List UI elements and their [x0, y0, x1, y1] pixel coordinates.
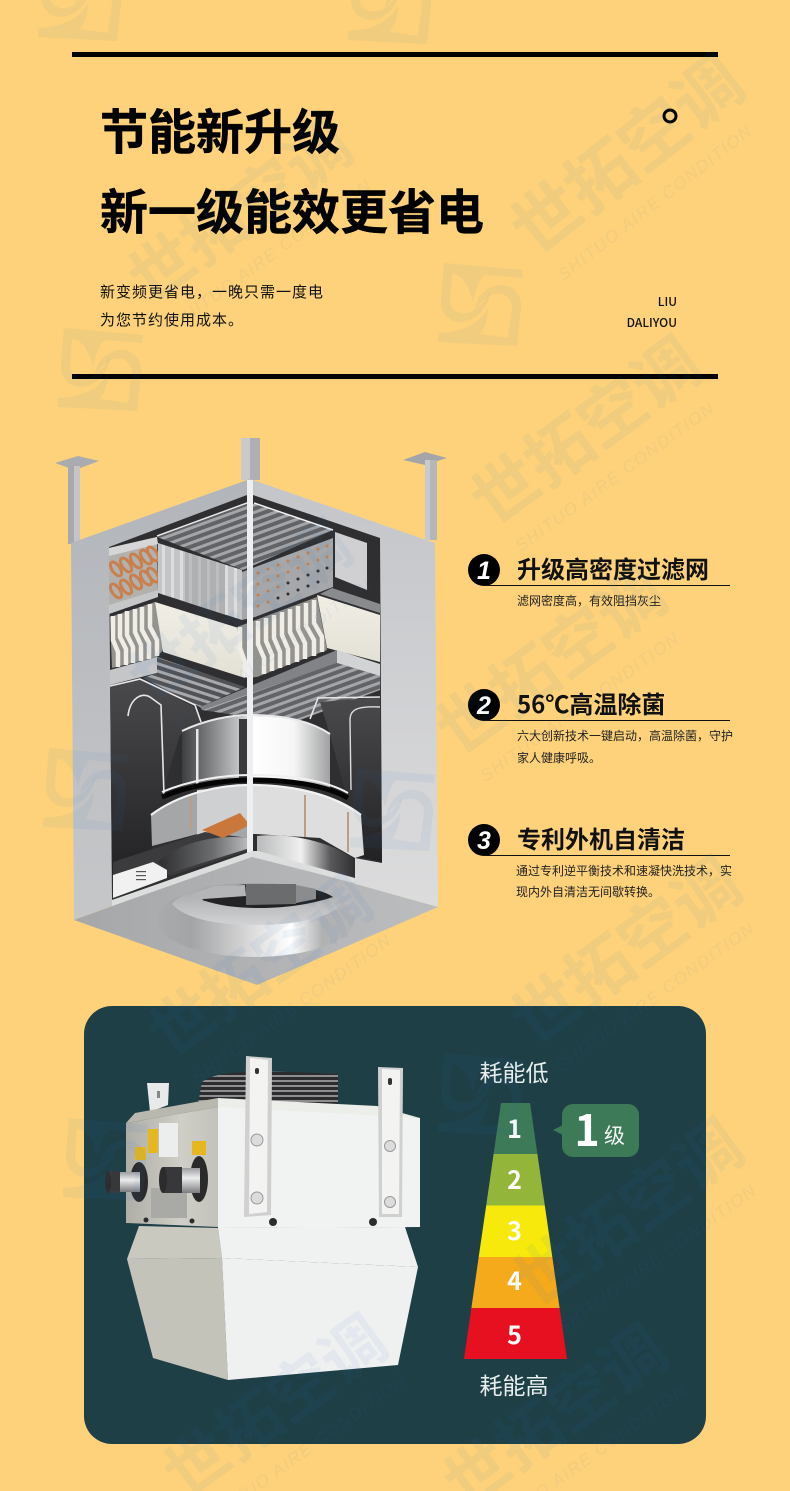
description 2	[517, 727, 733, 766]
description 3: 通过专利逆平衡技术和速凝快洗技术，实	[516, 862, 732, 879]
left pleated filter	[110, 602, 163, 668]
interior backing	[109, 495, 382, 900]
watermark text: SHITUO AIRE CONDITION	[552, 919, 758, 1076]
number badge 2: 2	[476, 692, 491, 720]
level 3: 3	[507, 1212, 522, 1248]
watermark text: 世拓空调	[107, 95, 368, 320]
watermark text: SHITUO AIRE CONDITION	[169, 576, 375, 733]
level 5: 5	[507, 1316, 522, 1352]
hood side	[127, 1258, 228, 1380]
cross beam	[200, 650, 337, 710]
heading 2: 56℃高温除菌	[517, 685, 665, 720]
centrifugal fan drum	[162, 715, 348, 798]
right mounting bracket	[378, 1067, 403, 1217]
fin face of heat exchanger	[158, 543, 242, 620]
side block	[335, 532, 367, 590]
english label	[627, 293, 677, 331]
number badge 1: 1	[477, 557, 491, 585]
icon: small ring	[664, 110, 676, 122]
label: low consumption: 耗能低	[480, 1054, 548, 1088]
intro text: 新变频更省电，一晚只需一度电	[100, 281, 324, 302]
watermark text: 世拓空调	[448, 311, 718, 544]
watermark text: 世拓空调	[127, 850, 388, 1075]
level 4	[471, 1257, 560, 1308]
lower left plate	[110, 657, 157, 685]
title: 新一级能效更省电	[100, 173, 484, 243]
watermark text: 世拓空调	[486, 28, 762, 274]
lower fins right	[202, 663, 380, 720]
watermark text: 世拓空调	[488, 831, 758, 1064]
orange control part	[202, 813, 250, 838]
centre corner post	[247, 480, 253, 858]
number badge 3: 3	[477, 827, 491, 855]
centre mounting bracket	[244, 1056, 272, 1217]
intro text	[100, 281, 324, 330]
level 3	[479, 1206, 552, 1257]
outdoor unit photo	[105, 1056, 420, 1380]
heading 1: 升级高密度过滤网	[517, 550, 709, 585]
level 4: 4	[507, 1262, 522, 1298]
description 1: 滤网密度高，有效阻挡灰尘	[517, 592, 661, 609]
level 1	[494, 1103, 537, 1154]
top plate	[218, 1098, 420, 1118]
feature 3	[468, 820, 732, 900]
right pleated filter	[237, 597, 327, 678]
copper coil box	[108, 537, 161, 614]
cutaway air handling unit illustration	[55, 438, 447, 985]
watermark text: SHITUO AIRE CONDITION	[477, 629, 683, 786]
callout: grade 1: 级	[604, 1120, 625, 1150]
underline	[484, 585, 730, 586]
feature 2	[468, 685, 733, 766]
centre hanger bracket	[241, 438, 260, 480]
underline	[484, 855, 730, 856]
description 3: 现内外自清洁无间歇转换。	[516, 883, 660, 900]
watermark text: SHITUO AIRE CONDITION	[554, 1181, 760, 1338]
callout: grade 1	[553, 1097, 639, 1159]
lower chamber	[110, 678, 382, 875]
watermark text: SHITUO AIRE CONDITION	[512, 399, 718, 556]
bottom face	[74, 855, 438, 985]
right pipe	[159, 1156, 208, 1202]
ceiling fins	[157, 504, 333, 570]
lower fins left	[143, 657, 245, 707]
electric box	[159, 1123, 178, 1157]
panel background	[84, 1006, 706, 1444]
title	[100, 93, 484, 243]
side panel	[126, 1107, 218, 1227]
left pipe	[105, 1162, 148, 1202]
energy pyramid	[464, 1103, 567, 1359]
english label: LIU	[658, 293, 677, 310]
front panel	[218, 1107, 420, 1228]
right wall	[250, 479, 438, 907]
watermark text: 世拓空调	[413, 541, 683, 774]
warning labels	[135, 1129, 206, 1160]
right filter face	[317, 595, 380, 662]
level 1: 1	[507, 1110, 522, 1146]
level 2: 2	[507, 1161, 522, 1197]
watermark logos	[38, 0, 523, 1201]
level 2	[486, 1154, 545, 1206]
level 5	[464, 1308, 567, 1359]
intro text: 为您节约使用成本。	[100, 309, 244, 330]
number badge 1	[468, 554, 500, 586]
number badge 3	[468, 824, 500, 856]
left wall	[71, 479, 250, 920]
description 2: 六大创新技术一键启动，高温除菌，守护	[517, 727, 733, 744]
label: high consumption: 耗能高	[480, 1367, 548, 1401]
right hanger bracket	[403, 452, 447, 540]
neck front	[218, 1227, 418, 1267]
small left bracket	[147, 1083, 169, 1112]
title: 节能新升级	[100, 93, 340, 163]
watermark text: SHITUO AIRE CONDITION	[169, 176, 375, 333]
neck side	[127, 1226, 222, 1259]
fan lower ring	[113, 785, 364, 884]
hood front	[222, 1258, 418, 1380]
description 3	[516, 862, 732, 900]
side top edge	[126, 1098, 218, 1123]
left filter face	[155, 602, 245, 678]
english label: DALIYOU	[627, 314, 677, 331]
bottom divider bar	[72, 374, 718, 379]
white electrical box	[113, 862, 167, 898]
data plate	[151, 1188, 187, 1218]
watermark text: SHITUO AIRE CONDITION	[554, 121, 756, 285]
watermark text: SHITUO AIRE CONDITION	[189, 931, 395, 1088]
number badge 2	[468, 689, 500, 721]
left hanger bracket	[55, 456, 99, 544]
perforated panel	[242, 538, 333, 620]
watermark text: 世拓空调	[107, 495, 368, 720]
underline	[484, 720, 730, 721]
top divider bar	[72, 52, 718, 57]
air outlet ring	[156, 883, 354, 957]
heading 3: 专利外机自清洁	[517, 820, 685, 855]
watermark text: 世拓空调	[490, 1093, 760, 1326]
fan guard	[198, 1072, 338, 1104]
description 2: 家人健康呼吸。	[517, 749, 601, 766]
panel: energy rating	[84, 1006, 706, 1444]
feature 1	[468, 550, 730, 609]
callout: grade 1: 1	[574, 1097, 600, 1159]
grommets	[144, 1218, 377, 1226]
